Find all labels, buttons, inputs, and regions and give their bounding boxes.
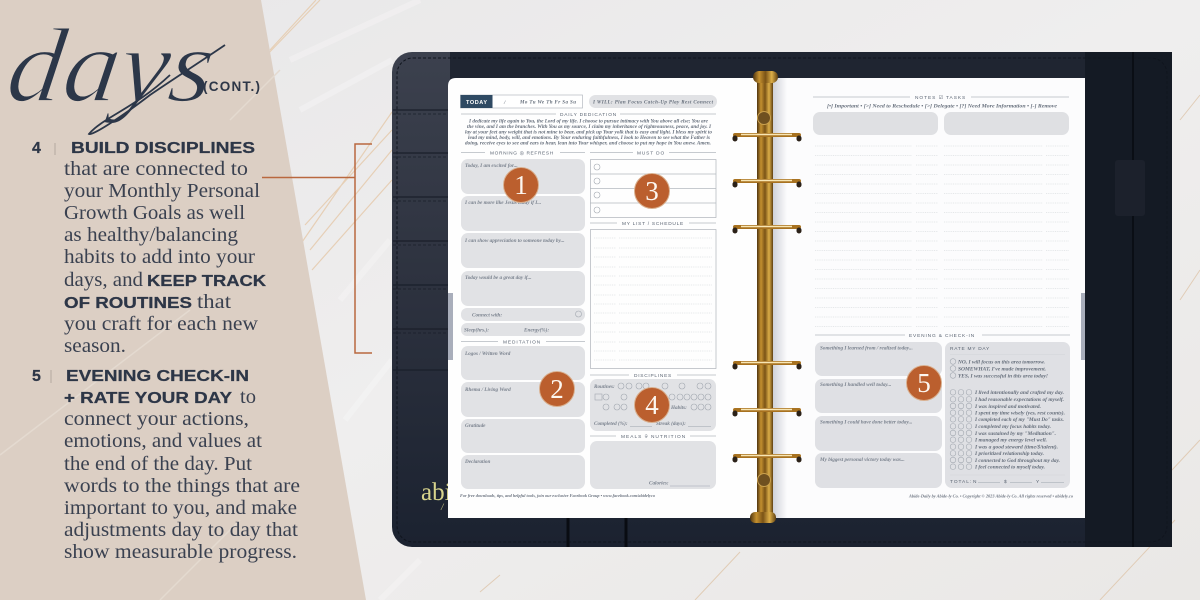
number badge 5: 5 [917,368,931,398]
morning refresh panel [461,150,585,336]
meals nutrition: Calories: [649,480,669,486]
date bar: / [503,101,506,106]
daily dedication: doing, receive eyes to see and ears to hear, lean into Your whisper, and choose to put my hope in You anew. Amen. [465,142,711,146]
gold foil logo on cover: abide [421,479,475,506]
number badge 4 [634,388,670,422]
planner right page [772,78,1085,518]
text block: step 4: Growth Goals as well [64,203,246,224]
evening check-in panel: EVENING & CHECK-IN [909,333,975,339]
morning refresh panel: Today, I am excited for... [465,163,518,169]
daily dedication: lay at your feet any weight that is not mine to bear, and pick up Your yolk that is easy and light. I bless my spirit to [465,130,713,136]
rate my day panel: TOTAL: [950,479,972,485]
rate my day panel: I connected to God throughout my day. [974,459,1060,464]
rate my day panel: $ [1004,479,1007,485]
subtitle: cont.: (CONT.) [203,79,260,94]
morning refresh panel: I can be more like Jesus today if I... [464,200,541,206]
disciplines tracker: DISCIPLINES [634,373,672,379]
text block: step 5: connect your actions, [64,409,249,430]
must do checklist: MUST DO [637,150,665,156]
daily dedication [461,112,716,146]
meditation panel: MEDITATION [503,340,541,346]
text block: step 5: 5 [32,368,41,385]
text block: step 5: emotions, and values at [64,431,263,452]
text block: step 5: important to you, and make [64,498,297,519]
right page footer: Abide-Daily by Abide-ly Co. • Copyright © 2023 Abide-ly Co. All rights reserved • abidely.co [908,494,1073,498]
rate my day panel: I was a good steward (time/$/talent). [974,446,1058,450]
meals nutrition [590,434,716,489]
number badge 5 [906,366,942,400]
text block: step 5: words to the things that are [64,476,300,497]
morning refresh panel: MORNING ◎ REFRESH [490,150,554,156]
rate my day panel: I feel connected to myself today. [974,466,1045,470]
meditation panel: Logos / Written Word [464,351,511,357]
must do checklist [590,150,716,218]
morning refresh panel: Sleep(hrs.): [464,326,489,334]
number badge 2 [540,372,574,406]
left page footer: For free downloads, tips, and helpful tools, join our exclusive Facebook Group • www.facebook.com/abidelyco [460,493,655,498]
daily dedication: DAILY DEDICATION [560,112,617,118]
daily dedication: I dedicate my life again to You, the Lord of my life. I choose to pursue intimacy with You above all else; You are [468,120,709,124]
text block: step 4: OF ROUTINES [64,295,192,312]
rate my day panel: SOMEWHAT, I've made improvement. [958,368,1046,372]
rate my day panel: YES, I was successful in this area today! [958,374,1048,380]
meditation panel [461,340,585,489]
my list schedule [590,221,716,368]
text block: step 5: the end of the day. Put [64,454,253,475]
number badge 4: 4 [645,390,659,420]
rate my day panel: I was inspired and motivated. [974,405,1041,410]
text block: step 5: to [240,387,256,408]
title: days: days [1,7,222,124]
text block: step 5: show measurable progress. [64,542,297,563]
text block: step 4: BUILD DISCIPLINES [71,140,255,157]
number badge 2: 2 [550,374,564,404]
evening check-in panel [815,333,1070,488]
rate my day panel [945,342,1070,488]
rate my day panel: I had reasonable expectations of myself. [974,398,1064,403]
disciplines tracker: Streak (days): [656,420,686,427]
page tabs [448,293,1085,360]
rate my day panel: NO, I will focus on this area tomorrow. [957,360,1045,366]
rate my day panel: I managed my energy level well. [974,438,1047,444]
text block: step 4: your Monthly Personal [64,181,261,202]
notes and tasks header: [•] Important • [>] Need to Reschedule • [>] Delegate • [?] Need More Information • [-] Remove [827,104,1058,110]
text block: step 4: KEEP TRACK [147,273,267,290]
planner left page [448,78,760,518]
disciplines tracker: Completed (%): [594,420,628,427]
gold binder spine and rings [735,71,799,523]
evening check-in panel: Something I could have done better today... [820,420,912,426]
meditation panel: Rhema / Living Word [465,387,511,393]
date bar: TODAY [466,100,487,106]
text block: step 5: + RATE YOUR DAY [64,390,232,407]
disciplines tracker [590,373,716,431]
date bar [460,95,582,108]
bracket connector [262,144,372,353]
notes lines [815,146,1069,326]
number badge 1: 1 [514,170,528,200]
text block: step 4: that [197,292,232,313]
morning refresh panel: Today would be a great day if... [465,275,532,281]
number badge 3 [634,174,670,208]
evening check-in panel: Something I handled well today... [820,382,891,388]
text block: step 4 [32,140,267,357]
daily dedication: the vine, and I am the branches. With You as my source, I claim my inheritance of righteousness, peace, and joy. I [467,125,712,130]
rate my day panel: I completed my focus habits today. [974,425,1051,430]
disciplines tracker: Habits: [670,405,687,411]
morning refresh panel: Connect with: [472,312,502,318]
beige side panel [0,0,366,600]
number badge 3: 3 [645,176,659,206]
my list schedule: MY LIST / SCHEDULE [622,221,684,227]
text block: step 4: days, and [64,270,143,291]
text block: step 4: season. [64,336,126,357]
rate my day panel: N [973,479,977,485]
meditation panel: Gratitude [465,423,486,429]
i will pill [589,95,717,108]
disciplines tracker: Routines: [594,384,615,390]
text block: step 4: as healthy/balancing [64,225,238,246]
daily dedication: lead my mind, body, will, and emotions. By Your enduring faithfulness, I look to Heaven to see what the Father is [468,136,710,141]
i will pill: I WILL: Plan Focus Catch-Up Play Rest Connect [592,100,714,106]
gold foil logo on cover: / [440,502,445,512]
rate my day panel: I prioritized relationship today. [974,452,1044,457]
text block: step 5: EVENING CHECK-IN [66,368,249,385]
morning refresh panel: I can show appreciation to someone today by... [464,238,565,244]
notes and tasks header: NOTES ☑ TASKS [915,95,966,101]
notes boxes [813,112,1069,135]
notes and tasks header [813,95,1069,110]
meals nutrition: MEALS ⌾ NUTRITION [621,434,686,440]
number badge 1 [504,168,538,202]
text block: step 4: 4 [32,140,41,157]
text block: step 5 [32,368,300,563]
rate my day panel: I completed each of my "Must Do" tasks. [974,418,1064,423]
meditation panel: Declaration [464,459,490,465]
rate my day panel: RATE MY DAY [950,346,990,352]
rate my day panel: Y [1036,479,1040,485]
text block: step 4: you craft for each new [64,314,258,335]
morning refresh panel: Energy(%): [523,326,549,334]
rate my day panel: I spent my time wisely (yes, rest counts). [974,412,1065,416]
text block: step 4: that are connected to [64,159,248,180]
date bar: Mo Tu We Th Fr Sa Su [519,100,576,106]
evening check-in panel: My biggest personal victory today was... [819,457,905,463]
rate my day panel: I lived intentionally and crafted my day. [974,391,1064,396]
leather planner cover [392,52,1172,547]
rate my day panel: I was sustained by my "Meditation". [974,432,1056,437]
text block: step 5: adjustments day to day that [64,520,299,541]
text block: step 4: habits to add into your [64,247,256,268]
evening check-in panel: Something I learned from / realized today... [820,346,913,352]
